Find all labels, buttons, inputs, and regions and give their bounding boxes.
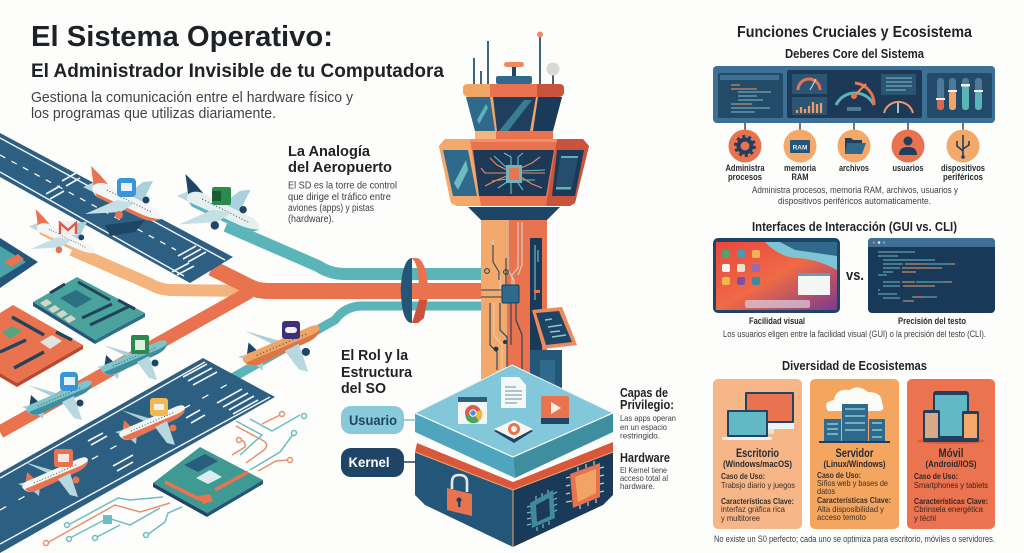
card: mobile: Características Clave: (914, 496, 988, 506)
body: analogy: El SD es la torre de control (288, 180, 397, 192)
flight: mail plane (83, 166, 161, 221)
stream: teal upper (226, 226, 490, 274)
intro text (31, 89, 353, 122)
flight: white plane lower (18, 449, 88, 497)
duty: memory: RAM (793, 144, 807, 152)
circuit traces (44, 412, 306, 546)
duty: files: archivos (839, 163, 869, 173)
user slab (415, 365, 613, 478)
stream: peach (72, 250, 250, 291)
card: desktop: interfaz gráfica rica (721, 504, 785, 514)
duty: files (838, 130, 870, 173)
kernel block (415, 442, 613, 547)
pill: usuario (341, 406, 416, 434)
duties description: dispositivos periféricos automaticamente. (778, 196, 931, 207)
card: server: Características Clave: (817, 495, 891, 505)
kiosk terminal (532, 307, 577, 349)
stream: orange lower (0, 292, 250, 432)
section heading: interfaces: Interfaces de Interacción (GUI vs. CLI) (752, 219, 957, 234)
card: mobile: Móvil (938, 446, 964, 460)
card: desktop: Características Clave: (721, 496, 794, 506)
motherboard: teal (33, 277, 145, 344)
structure heading: Estructura (341, 364, 413, 381)
text: hardware: acceso total al (620, 473, 668, 483)
icon: excel (212, 187, 231, 205)
card: mobile: y téchl (914, 513, 936, 523)
text: hardware: Hardware (620, 451, 670, 465)
subtitle: El Administrador Invisible de tu Computadora (31, 60, 444, 82)
card: desktop (713, 379, 802, 529)
dashboard (713, 66, 995, 123)
card: server (810, 379, 899, 529)
control tower (341, 24, 995, 547)
motherboard: small (153, 447, 263, 517)
body: analogy: aviones (apps) y pistas (288, 203, 374, 214)
duty: users (892, 130, 924, 173)
pill: kernel (341, 448, 416, 477)
duty: memory: memoria (784, 163, 817, 173)
duty: memory: RAM (792, 172, 808, 182)
card: desktop: (Windows/macOS) (723, 459, 792, 470)
cli window (868, 238, 995, 313)
icon: document (150, 398, 168, 416)
heading: analogy: La Analogía (288, 144, 371, 160)
body: analogy: que dirige el tráfico entre (288, 192, 391, 203)
icon: gmail (59, 221, 77, 235)
text: privilege layers: Privilegio: (620, 398, 674, 412)
duty: memory (784, 130, 817, 182)
card: mobile: Smartphones y tablets (914, 480, 988, 490)
analogy text (288, 144, 397, 225)
center window: circuit (473, 150, 554, 196)
right window (552, 150, 584, 196)
icon: phones and tablet (917, 391, 985, 444)
flight: gmail plane (29, 209, 94, 255)
title: El Sistema Operativo: (31, 21, 333, 53)
icon: padlock (447, 475, 472, 516)
duty: devices (941, 130, 985, 182)
intro text: los programas que utilizas diariamente. (31, 105, 276, 122)
structure heading: El Rol y la (341, 347, 409, 364)
chip (502, 285, 519, 303)
card: mobile: (Android/IOS) (926, 459, 976, 470)
duties description (752, 185, 958, 207)
icon: gear tile (494, 420, 533, 443)
stream: teal lower (232, 306, 490, 378)
flight: white plane center (115, 398, 185, 445)
duty: devices: dispositivos (941, 163, 985, 173)
card: server: Alta disposibilidad y (817, 504, 885, 514)
card: desktop: y multitoree (721, 513, 760, 523)
body: analogy: (hardware). (288, 214, 334, 225)
card: desktop: Caso de Uso: (721, 471, 765, 481)
body: analogy (288, 180, 397, 225)
duty: processes: procesos (728, 172, 762, 182)
icon: gamepad (282, 321, 300, 339)
text: privilege layers: Capas de (620, 386, 668, 400)
dashboard: sliders (927, 73, 992, 118)
pill: kernel: Kernel (348, 455, 390, 470)
duties description: Administra procesos, memoria RAM, archivos, usuarios y (752, 185, 958, 196)
icon: browser (458, 397, 487, 424)
traces: right (232, 412, 306, 471)
data streams (0, 226, 490, 432)
text: privilege layers: Las apps operan (620, 413, 676, 423)
section heading: ecosystems: Diversidad de Ecosistemas (782, 359, 927, 373)
motherboard: orange (0, 305, 83, 387)
text: hardware (620, 451, 670, 491)
intro text: Gestiona la comunicación entre el hardware físico y (31, 89, 353, 106)
flight: teal plane upper (97, 335, 167, 380)
shaft (468, 207, 562, 390)
flight: excel plane (177, 174, 259, 231)
gui tablet (713, 238, 840, 313)
section heading: core duties: Deberes Core del Sistema (785, 47, 925, 61)
layered architecture (415, 365, 613, 547)
card: server: datos (817, 486, 835, 496)
icon: desktop and laptop (722, 392, 794, 440)
stream: orange upper (212, 268, 490, 291)
text: privilege layers: en un espacio (620, 422, 667, 432)
card: mobile: Caso de Uso: (914, 471, 958, 481)
heading: analogy: del Aeropuerto (288, 160, 392, 176)
icon: mail orange (54, 449, 73, 467)
card: mobile: Cbrinsela energética (914, 504, 983, 514)
left window (443, 150, 477, 196)
duty: users: usuarios (892, 163, 924, 173)
card: desktop: Escritorio (736, 446, 779, 460)
card: desktop: Trabsjo diario y juegos (721, 480, 795, 490)
duty: processes (726, 130, 765, 182)
structure heading: del SO (341, 380, 386, 397)
card: server: acceso temoto (817, 512, 866, 522)
icon: cloud and servers (819, 387, 890, 443)
structure heading (341, 347, 413, 397)
gui caption: Facilidad visual (749, 316, 805, 327)
dashboard: code panel (718, 73, 783, 118)
text: hardware: El Kernel tiene (620, 465, 667, 475)
card: server: (Linux/Windows) (824, 459, 886, 470)
card: server: Caso de Uso: (817, 470, 861, 480)
vs label: vs. (846, 268, 864, 284)
traces: left (44, 497, 182, 546)
runway top (0, 133, 233, 283)
card: mobile (907, 379, 995, 529)
icon: cpu chip teal (527, 490, 557, 531)
heading: analogy (288, 144, 392, 176)
text: hardware: hardware. (620, 481, 655, 491)
duty: devices: periféricos (943, 172, 983, 182)
pill: usuario: Usuario (349, 412, 397, 428)
text: privilege layers: restringido. (620, 430, 660, 440)
flight: teal plane lower (22, 372, 92, 420)
icon: excel (131, 335, 149, 354)
right column heading: Funciones Cruciales y Ecosistema (737, 24, 972, 41)
icon: document (501, 377, 526, 408)
collar ring (401, 258, 428, 323)
card: server: Servidor (836, 446, 874, 460)
icon: cpu chip orange (566, 461, 604, 509)
upper cab (463, 84, 564, 139)
dashboard: gauges (787, 70, 922, 118)
main cab (439, 139, 589, 206)
duty: processes: Administra (726, 163, 765, 173)
text: privilege layers (620, 386, 676, 440)
device: tablet (0, 238, 38, 288)
icon: mail (117, 178, 136, 197)
tower antennas (474, 32, 560, 84)
flight: game plane (238, 321, 320, 372)
icon: mail (60, 372, 78, 391)
runway bottom (0, 358, 275, 553)
card: server: Siños web y bases de (817, 478, 888, 488)
cli caption: Precisión del testo (898, 316, 966, 327)
icon: video (541, 396, 569, 424)
